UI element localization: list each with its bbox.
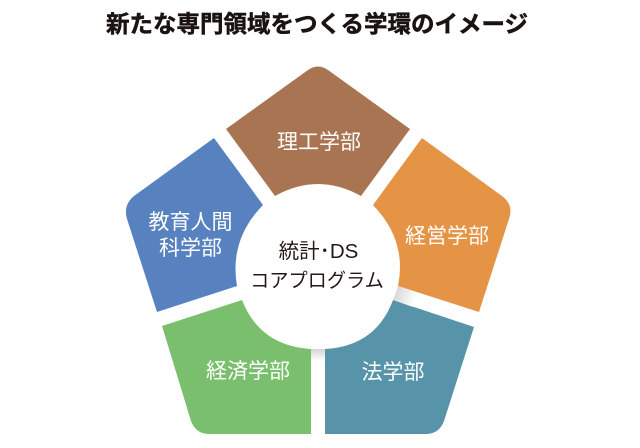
panel: 理工学部: 理工学部 <box>277 131 361 154</box>
panel: 経営学部: 経営学部 <box>405 225 489 248</box>
panel: 経営学部 <box>373 138 510 312</box>
panel: 法学部: 法学部 <box>362 361 424 384</box>
panel: 経済学部: 経済学部 <box>206 360 290 383</box>
panel: 教育人間科学部: 科学部 <box>159 237 222 260</box>
panel: 法学部 <box>325 300 474 434</box>
panel: 教育人間科学部: 教育人間 <box>148 211 232 234</box>
title: 新たな専門領域をつくる学環のイメージ <box>106 11 528 37</box>
center circle: コアプログラム <box>250 270 384 292</box>
panel: 教育人間科学部 <box>126 138 263 312</box>
panel: 経済学部 <box>162 300 311 434</box>
panel: 理工学部 <box>226 66 410 196</box>
center circle <box>236 185 400 349</box>
gap shadows <box>311 286 418 361</box>
center circle: 統計･DS <box>279 240 358 263</box>
